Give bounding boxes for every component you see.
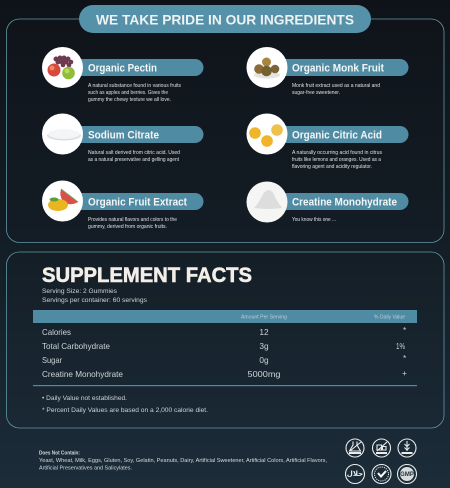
table rows: 0g: [259, 355, 269, 365]
ingredient: organic monk fruit: [246, 47, 408, 96]
table header: Amount Per Serving: [241, 314, 287, 320]
ingredient: organic fruit extract: gummy, derived from organic fruits.: [88, 224, 167, 230]
ingredient: organic pectin: such as apples and berries. Gives the: [88, 90, 168, 96]
icon: GMP seal: GMP: [400, 472, 414, 478]
icon: watermelon and mango: [48, 189, 78, 211]
icon: white powder dish: [47, 129, 81, 140]
table rows: +: [402, 368, 407, 378]
table rows: *: [403, 353, 407, 363]
table rows: Total Carbohydrate: [42, 341, 110, 351]
table rows: 3g: [259, 341, 269, 351]
table rows: Sugar: [42, 355, 62, 365]
ingredient: sodium citrate: Sodium Citrate: [88, 130, 159, 142]
ingredient: organic citric acid: fruits like lemons and oranges. Used as a: [292, 157, 381, 163]
ingredient: organic fruit extract: Provides natural flavors and colors to the: [88, 217, 177, 223]
icon: quality check seal: [372, 464, 391, 484]
heading: supplement facts: SUPPLEMENT FACTS: [42, 264, 252, 287]
does not contain: [39, 450, 327, 472]
ingredient: creatine monohydrate: You know this one ...: [292, 217, 336, 223]
table header: [33, 310, 417, 323]
ingredient: organic pectin: [42, 47, 204, 103]
footnotes: [42, 396, 208, 414]
ingredient: organic pectin: Organic Pectin: [88, 62, 157, 74]
title: we take pride in our ingredients: [79, 5, 371, 33]
ingredient: organic monk fruit: sugar-free sweetener.: [292, 90, 340, 96]
ingredient: organic fruit extract: [42, 180, 204, 230]
ingredient: organic monk fruit: Organic Monk Fruit: [292, 62, 384, 74]
icon: citrus slices: [249, 124, 283, 147]
does not contain: Does Not Contain:: [39, 450, 80, 456]
panel: supplement facts: [6, 252, 444, 428]
icon: apples and grapes: [48, 56, 75, 79]
ingredient: organic pectin: gummy the chewy texture we all love.: [88, 97, 171, 103]
ingredient: sodium citrate: [42, 114, 204, 163]
ingredient: sodium citrate: Natural salt derived from citric acid. Used: [88, 150, 180, 156]
icon: monk fruit: [254, 58, 280, 78]
ingredient: creatine monohydrate: Creatine Monohydrate: [292, 196, 397, 208]
icon: sugar free: [372, 439, 390, 457]
ingredient: organic citric acid: A naturally occurring acid found in citrus: [292, 150, 382, 156]
icon: powder pile: [254, 190, 282, 209]
icon: no artificial flask: [346, 439, 364, 457]
ingredient: organic fruit extract: Organic Fruit Extract: [88, 196, 187, 208]
table rows: 12: [259, 327, 269, 337]
icon: halal: حلال: [347, 470, 363, 478]
does not contain: Artificial Preservatives and Salicylates.: [39, 466, 132, 472]
table rows: 1%: [396, 341, 405, 351]
table rows: 5000mg: [248, 369, 281, 379]
footnotes: • Daily Value not established.: [42, 396, 127, 402]
table rows: Calories: [42, 327, 71, 337]
table rows: Creatine Monohydrate: [42, 369, 123, 379]
table rows: [42, 325, 407, 379]
ingredient: organic pectin: A natural substance found in various fruits: [88, 83, 181, 89]
serving info: Servings per container: 60 servings: [42, 298, 147, 304]
panel: ingredients: [6, 5, 444, 242]
ingredient: creatine monohydrate: [246, 182, 408, 223]
ingredient: organic citric acid: [246, 114, 408, 170]
footnotes: * Percent Daily Values are based on a 2,000 calorie diet.: [42, 408, 208, 414]
certification icons: [346, 439, 416, 484]
ingredient: organic citric acid: Organic Citric Acid: [292, 130, 382, 142]
table header: % Daily Value: [374, 314, 405, 320]
title: we take pride in our ingredients: WE TAKE PRIDE IN OUR INGREDIENTS: [96, 12, 354, 28]
ingredient: organic citric acid: flavoring agent and acidity regulator.: [292, 164, 372, 170]
ingredient: organic monk fruit: Monk fruit extract used as a natural and: [292, 83, 380, 89]
ingredient: sodium citrate: as a natural preservative and gelling agent: [88, 157, 179, 163]
serving info: Serving Size: 2 Gummies: [42, 289, 117, 295]
table rows: *: [403, 325, 407, 335]
serving info: [42, 289, 147, 304]
does not contain: Yeast, Wheat, Milk, Eggs, Gluten, Soy, Gelatin, Peanuts, Dairy, Artificial Sweetener, Artificial Colors, Artificial Flavors,: [39, 458, 327, 464]
icon: gluten free wheat: [398, 439, 416, 457]
